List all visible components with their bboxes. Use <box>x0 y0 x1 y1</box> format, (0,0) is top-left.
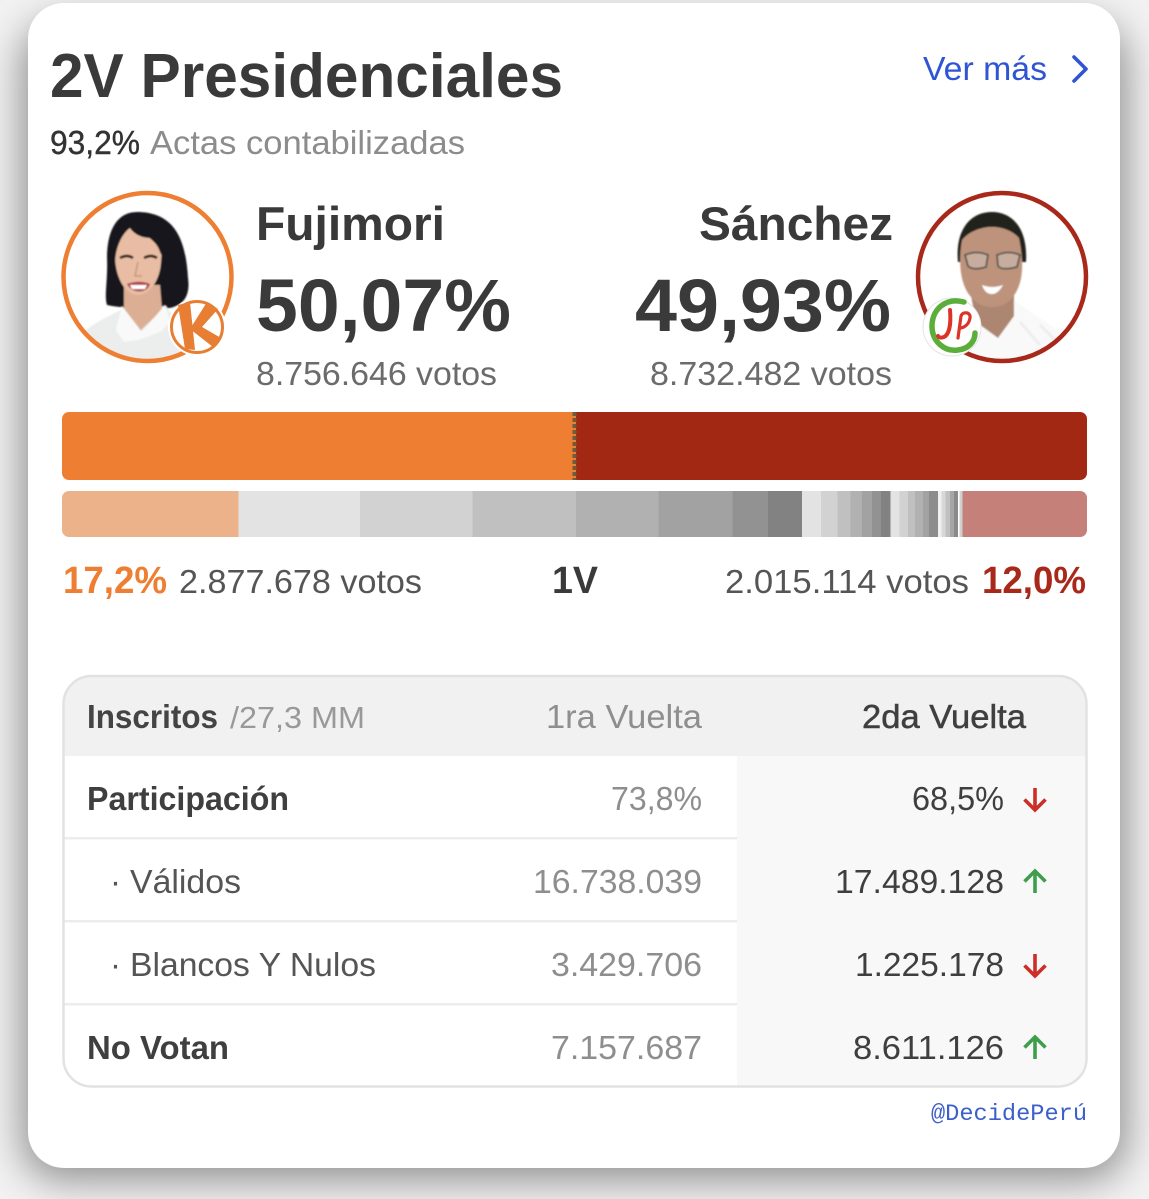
panel: turnout table <box>64 676 1086 1087</box>
table header: /27,3 MM <box>230 700 365 735</box>
portrait: Fujimori <box>64 193 232 368</box>
row: Blancos y Nulos <box>110 946 1046 983</box>
row: Blancos y Nulos: 3.429.706 <box>551 946 702 983</box>
candidate: Sánchez results: 8.732.482 votos <box>650 355 892 392</box>
title: 2V Presidenciales <box>50 42 563 111</box>
row: Válidos: 17.489.128 <box>835 863 1004 900</box>
first round: Sánchez: 2.015.114 votos <box>725 563 969 600</box>
row: No Votan: 8.611.126 <box>853 1029 1004 1066</box>
icon: down arrow <box>1024 788 1046 810</box>
row: Válidos: 16.738.039 <box>533 863 702 900</box>
candidate: Fujimori results <box>256 197 511 392</box>
candidate: Sánchez results: Sánchez <box>699 197 893 250</box>
badge: Fuerza Popular K <box>168 298 226 356</box>
first round label: 1V <box>552 560 599 602</box>
row: Válidos: Válidos <box>130 863 241 900</box>
first round: Fujimori: 17,2% <box>63 560 167 602</box>
row: No Votan: No Votan <box>87 1029 229 1066</box>
row: No Votan: 7.157.687 <box>551 1029 702 1066</box>
first round: Sánchez: 12,0% <box>982 560 1086 602</box>
row: Participación: Participación <box>87 780 289 817</box>
icon: up arrow <box>1024 1037 1046 1059</box>
row: Blancos y Nulos: 1.225.178 <box>855 946 1004 983</box>
icon: down arrow <box>1024 954 1046 976</box>
portrait: Sánchez <box>918 193 1086 370</box>
chart: first round bar <box>62 491 1087 537</box>
badge: Juntos por el Perú <box>923 298 981 356</box>
row: Blancos y Nulos: · <box>110 946 121 983</box>
counted ballots subtitle: Actas contabilizadas <box>150 124 465 161</box>
chart: second round bar <box>62 412 1087 480</box>
first round: Sánchez <box>725 560 1086 602</box>
table header: 1ra Vuelta <box>546 698 703 735</box>
candidate: Sánchez results <box>635 197 893 392</box>
candidate: Fujimori results: 50,07% <box>256 264 511 347</box>
row: No Votan <box>87 1029 1046 1066</box>
candidate: Sánchez results: 49,93% <box>635 264 891 347</box>
link: ver más: Ver más <box>923 50 1047 87</box>
candidate: Fujimori results: 8.756.646 votos <box>256 355 497 392</box>
row: Válidos: · <box>110 863 121 900</box>
row: Participación: 68,5% <box>912 780 1004 817</box>
row: Participación <box>87 780 1046 817</box>
first round: Fujimori: 2.877.678 votos <box>179 563 422 600</box>
first round: Fujimori <box>63 560 422 602</box>
table header: 2da Vuelta <box>862 698 1027 735</box>
row: Blancos y Nulos: Blancos Y Nulos <box>130 946 376 983</box>
credit: @DecidePerú <box>931 1101 1087 1127</box>
counted ballots subtitle: 93,2% <box>50 124 140 161</box>
table header <box>87 698 1027 735</box>
row: Válidos <box>110 863 1046 900</box>
candidate: Fujimori results: Fujimori <box>256 197 445 250</box>
table header: Inscritos <box>87 698 218 735</box>
icon: up arrow <box>1024 871 1046 893</box>
row: Participación: 73,8% <box>611 780 702 817</box>
